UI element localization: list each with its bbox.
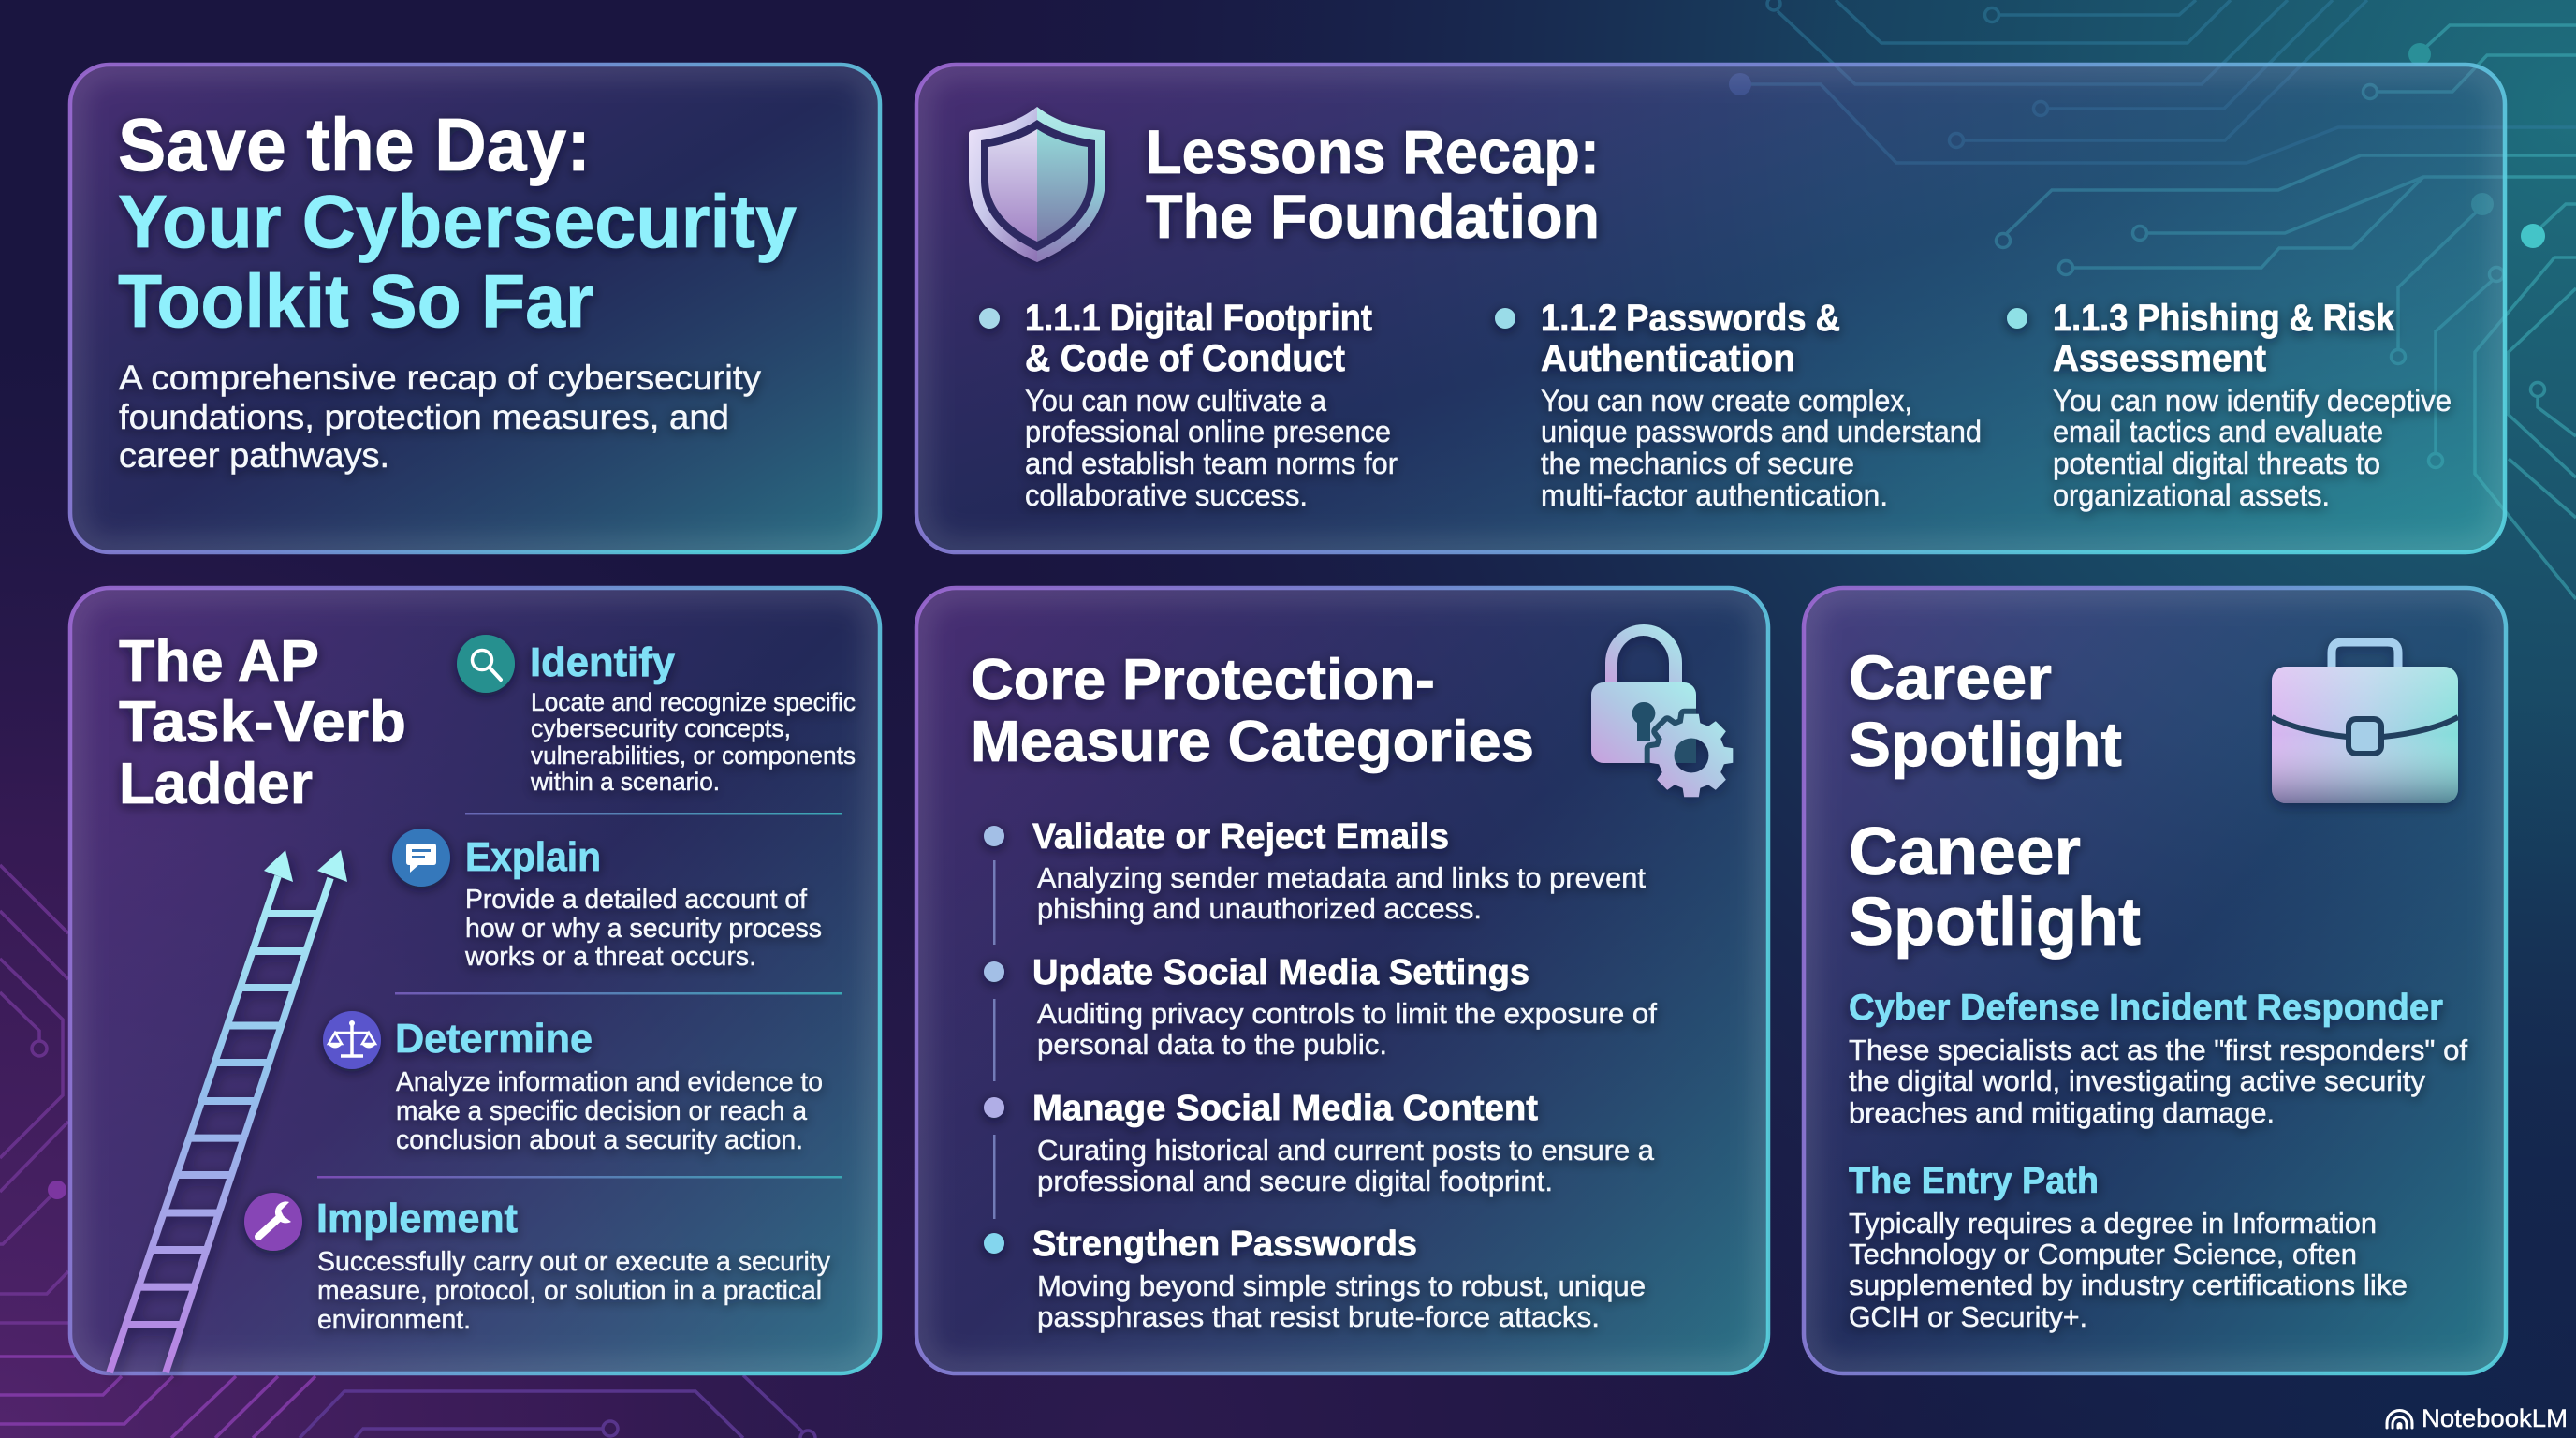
panel: AP task-verb ladder [70,588,880,1373]
measure: validate or reject emails: phishing and unauthorized access. [1037,892,1482,925]
step: Explain: works or a threat occurs. [464,942,756,972]
lesson 1.1.2: Authentication [1541,338,1795,379]
measure: validate or reject emails [984,817,1646,925]
lesson 1.1.1: & Code of Conduct [1025,338,1345,379]
step: Implement: Successfully carry out or execute a security [317,1247,830,1277]
lesson 1.1.2: unique passwords and understand [1541,415,1982,448]
main title [118,103,798,343]
subtitle: foundations, protection measures, and [119,398,729,436]
step: Determine: conclusion about a security action. [396,1125,803,1155]
lesson 1.1.2: You can now create complex, [1541,384,1912,418]
icon: magnifier [457,635,515,693]
step: Identify [457,635,856,796]
measure: manage social media content: Manage Social Media Content [1032,1089,1538,1128]
lesson 1.1.3: organizational assets. [2053,478,2330,512]
subtitle: career pathways. [119,436,389,475]
role description: breaches and mitigating damage. [1849,1096,2275,1129]
panel: core protection-measure categories [916,588,1768,1373]
step: Identify: within a scenario. [530,768,720,796]
step: Identify: cybersecurity concepts, [531,714,791,742]
measure: update social media settings: personal data to the public. [1037,1028,1387,1061]
measure: strengthen passwords: Moving beyond simple strings to robust, unique [1037,1269,1646,1302]
icon: wrench [244,1193,302,1251]
step: Explain: how or why a security process [465,914,822,944]
heading [1849,643,2122,780]
step: Determine: Analyze information and evidence to [396,1067,823,1097]
entry path: Technology or Computer Science, often [1849,1238,2357,1270]
step: Identify: Identify [530,639,676,685]
measure: update social media settings: Update Social Media Settings [1032,953,1530,992]
icon: briefcase [2272,642,2458,803]
heading: Spotlight [1849,710,2122,780]
heading: Lessons Recap: [1146,117,1600,186]
heading [119,629,406,816]
panel frame [70,588,880,1373]
panel frame [70,65,880,552]
heading [971,648,1534,774]
lesson 1.1.3: You can now identify deceptive [2053,384,2452,418]
measure: strengthen passwords: passphrases that resist brute-force attacks. [1037,1300,1600,1333]
measure: manage social media content [984,1089,1655,1197]
lesson 1.1.3: potential digital threats to [2053,447,2380,480]
measure: update social media settings [984,953,1657,1061]
step: Explain: Explain [465,834,601,880]
lesson 1.1.2: multi-factor authentication. [1541,478,1888,512]
panel: lessons recap [916,65,2505,552]
lesson 1.1.2: the mechanics of secure [1541,447,1854,480]
heading: Career [1849,643,2052,713]
repeated heading [1849,814,2141,960]
step: Determine: make a specific decision or reach a [396,1096,808,1126]
lesson 1.1.3: email tactics and evaluate [2053,415,2383,448]
subtitle: A comprehensive recap of cybersecurity [119,359,762,397]
measure: manage social media content: professional and secure digital footprint. [1037,1165,1553,1197]
step: Implement: Implement [316,1196,518,1241]
heading: The Foundation [1146,182,1600,251]
step: Explain: Provide a detailed account of [465,885,808,915]
heading: Ladder [119,752,313,816]
role description: These specialists act as the "first responders" of [1849,1034,2467,1066]
lesson 1.1.2 [1495,298,1982,512]
entry path: Typically requires a degree in Information [1849,1207,2377,1240]
main title: Your Cybersecurity [118,180,798,263]
step: Determine: Determine [395,1016,593,1062]
measure: manage social media content: Curating historical and current posts to ensure a [1037,1134,1655,1167]
lesson 1.1.1 [979,298,1398,512]
ladder with arrows [110,850,347,1372]
lesson 1.1.3: Assessment [2053,338,2266,379]
main title: Save the Day: [118,103,591,186]
measure: strengthen passwords: Strengthen Passwords [1032,1225,1417,1264]
lesson 1.1.2: 1.1.2 Passwords & [1541,298,1840,339]
step: Identify: Locate and recognize specific [531,688,856,716]
lesson 1.1.1: and establish team norms for [1025,447,1398,480]
entry path: GCIH or Security+. [1849,1300,2087,1333]
heading: Task-Verb [119,690,406,755]
icon: scales [323,1011,381,1069]
lesson 1.1.1: You can now cultivate a [1025,384,1326,418]
step: Implement: measure, protocol, or solution in a practical [317,1276,822,1306]
entry path [1849,1161,2408,1333]
lesson 1.1.3: 1.1.3 Phishing & Risk [2053,298,2395,339]
role description: the digital world, investigating active security [1849,1064,2426,1097]
role description [1849,988,2467,1129]
panel frame [916,65,2505,552]
panel: title [70,65,880,552]
measure: validate or reject emails: Analyzing sender metadata and links to prevent [1037,861,1646,894]
panel frame [916,588,1768,1373]
heading: The AP [119,629,319,694]
icon: speech bubble [392,829,450,887]
lesson 1.1.3 [2007,298,2452,512]
NotebookLM watermark: NotebookLM [2422,1404,2568,1432]
icon: padlock and gear [1591,624,1733,797]
circuit pattern: top right [1729,0,2576,599]
measure: strengthen passwords [984,1225,1646,1333]
panel frame [1804,588,2506,1373]
heading: Measure Categories [971,710,1534,774]
heading: Core Protection- [971,648,1435,712]
connector lines [993,860,996,1219]
measure: update social media settings: Auditing privacy controls to limit the exposure of [1037,997,1657,1030]
step: Explain [392,829,822,972]
lesson 1.1.1: 1.1.1 Digital Footprint [1025,298,1372,339]
subtitle [119,359,762,475]
repeated heading: Caneer [1849,814,2081,889]
step: Implement: environment. [317,1305,471,1335]
step: Implement [244,1193,830,1335]
step: Determine [323,1011,823,1155]
lesson 1.1.1: collaborative success. [1025,478,1308,512]
panel: career spotlight [1804,588,2506,1373]
icon: shield [969,107,1105,262]
entry path: The Entry Path [1849,1161,2099,1201]
heading [1146,117,1600,251]
measure: validate or reject emails: Validate or Reject Emails [1032,817,1449,857]
circuit pattern: bottom left [0,865,815,1438]
lesson 1.1.1: professional online presence [1025,415,1391,448]
repeated heading: Spotlight [1849,885,2141,960]
icon: notebook arcs [2387,1410,2412,1428]
main title: Toolkit So Far [118,259,593,343]
entry path: supplemented by industry certifications like [1849,1269,2408,1301]
role description: Cyber Defense Incident Responder [1849,988,2443,1028]
step: Identify: vulnerabilities, or components [531,741,856,770]
